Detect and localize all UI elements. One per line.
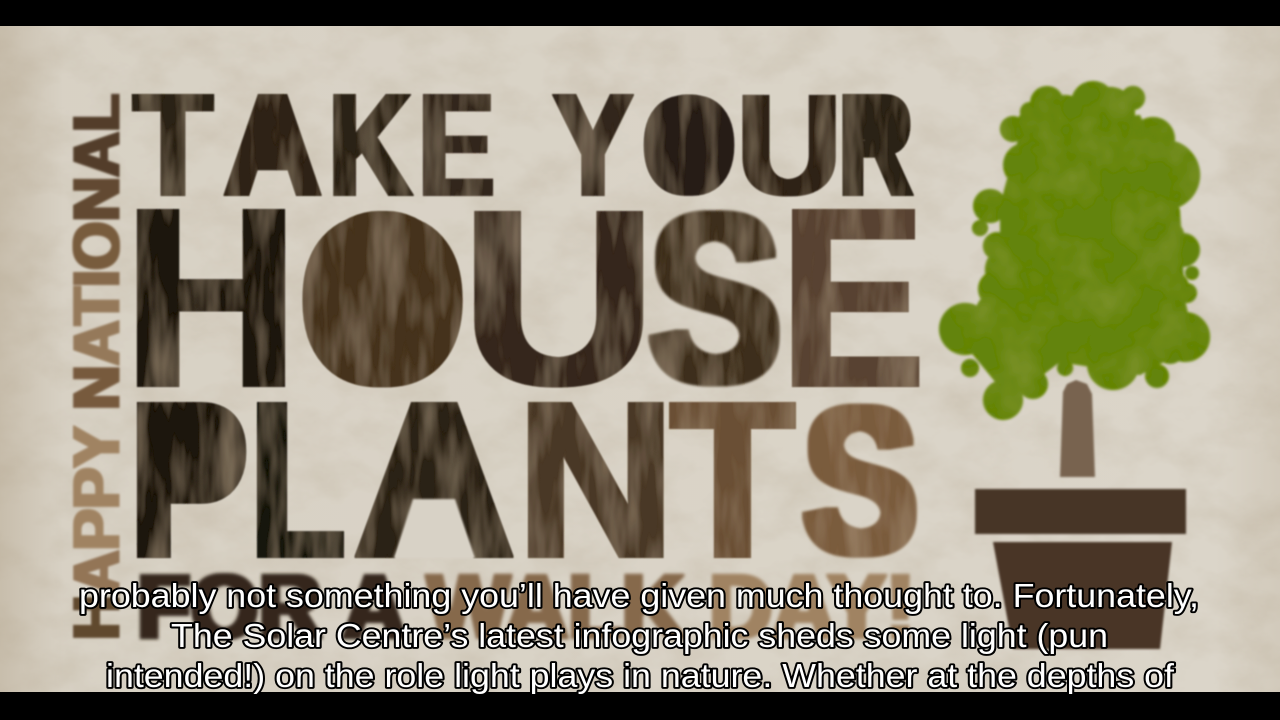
pot rim xyxy=(975,489,1186,534)
pot body xyxy=(993,542,1172,649)
headline row: house: H xyxy=(125,155,297,441)
headline row: plants xyxy=(129,354,794,605)
headline row: house: O xyxy=(298,165,468,435)
headline row: plants: P xyxy=(129,355,248,605)
subtitle caption: probably not something you’ll have given much thought to. Fortunately, xyxy=(79,577,1199,614)
headline row: take your: O xyxy=(642,67,736,224)
icon: potted topiary tree xyxy=(939,81,1210,649)
headline row: take your: A xyxy=(223,63,322,227)
headline letter: plants S: S xyxy=(803,364,917,597)
subtitle caption xyxy=(79,577,1199,694)
headline row: plants: L xyxy=(251,354,345,605)
side text: happy national: HAPPY NATIONAL xyxy=(59,94,133,640)
headline row: plants: A xyxy=(353,355,515,605)
headline row: take your: Y xyxy=(553,64,633,227)
subtitle caption: The Solar Centre’s latest infographic sheds some light (pun xyxy=(171,617,1108,654)
tree trunk xyxy=(1060,380,1095,477)
headline row: house: E xyxy=(782,154,924,440)
headline row: house: U xyxy=(462,158,655,437)
headline row: take your: R xyxy=(839,62,913,227)
headline row: for a walk day: FOR A WALK DAY! xyxy=(137,556,915,658)
heading: take your house plants xyxy=(125,62,924,658)
subtitle caption: intended!) on the role light plays in nature. Whether at the depths of xyxy=(106,657,1175,694)
headline row: take your xyxy=(133,62,913,227)
headline letter: house S: S xyxy=(649,164,781,432)
headline row: house xyxy=(125,154,924,441)
headline row: take your: U xyxy=(737,64,841,225)
headline row: take your: E xyxy=(418,63,495,227)
headline row: take your: K xyxy=(329,62,412,227)
tree foliage xyxy=(939,81,1210,420)
headline row: take your: T xyxy=(133,64,213,227)
headline row: plants: T xyxy=(671,355,794,605)
headline row: plants: N xyxy=(518,355,674,605)
notch under the A of plants xyxy=(394,499,475,558)
